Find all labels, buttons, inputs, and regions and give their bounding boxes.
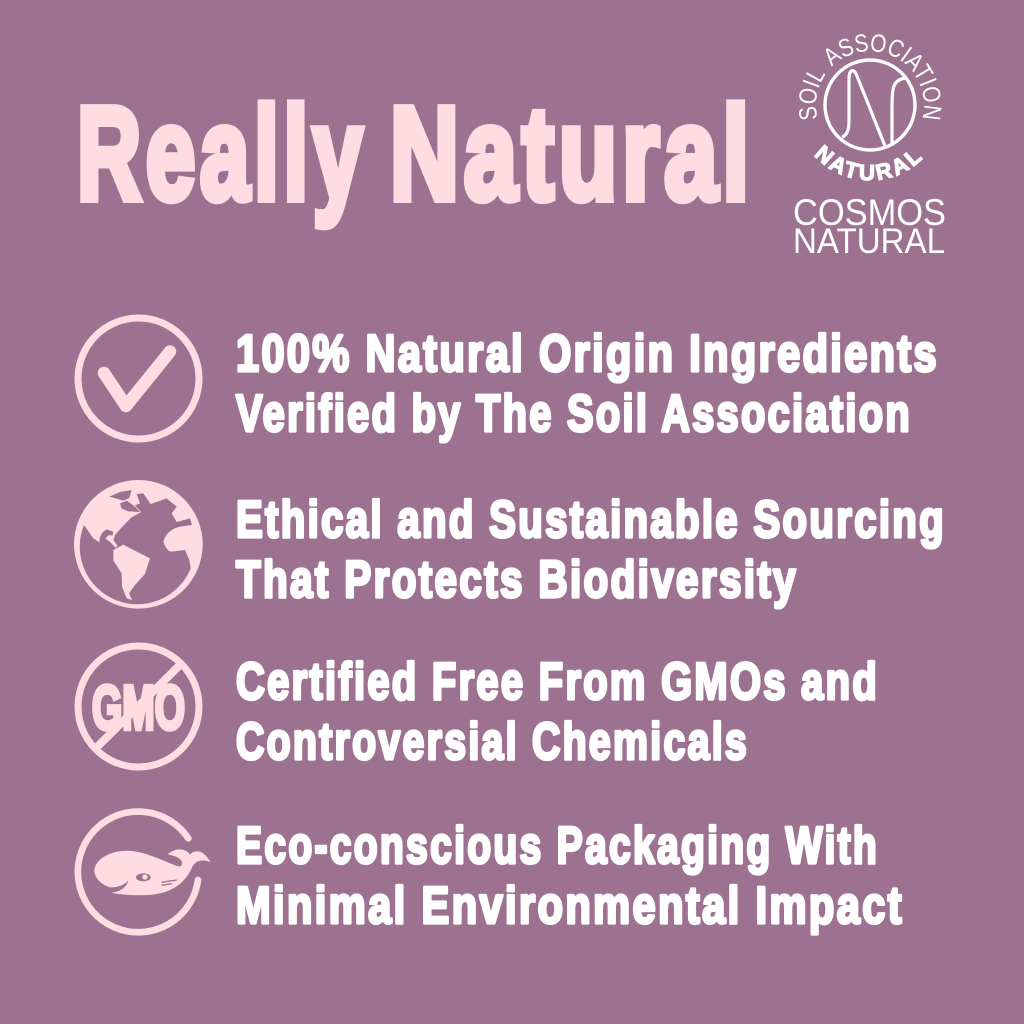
text: ethical sourcing: That Protects Biodiversity: [236, 551, 798, 609]
icon: no GMO: GMO: [92, 674, 185, 743]
badge text: Cosmos: COSMOS: [793, 192, 946, 233]
badge text: Natural: NATURAL: [814, 144, 924, 181]
badge: Soil Association Cosmos Natural: [793, 34, 946, 261]
text: ethical sourcing: [236, 491, 946, 609]
title: Really: [77, 80, 367, 227]
icon: whale: [78, 812, 211, 932]
badge ring with N monogram: [825, 60, 915, 150]
text: packaging: [236, 817, 904, 935]
icon: globe: [74, 480, 203, 609]
icon: no GMO: [78, 646, 199, 767]
text: GMO free: Controversial Chemicals: [236, 713, 749, 771]
icon: check mark: [78, 318, 199, 439]
title: Natural: [390, 80, 754, 227]
badge text: Natural label: NATURAL: [793, 222, 945, 261]
text: natural origin: [236, 325, 939, 443]
title: [77, 80, 754, 227]
text: GMO free: [236, 653, 879, 771]
badge text: Soil Association: SOIL ASSOCIATION: [799, 34, 942, 120]
